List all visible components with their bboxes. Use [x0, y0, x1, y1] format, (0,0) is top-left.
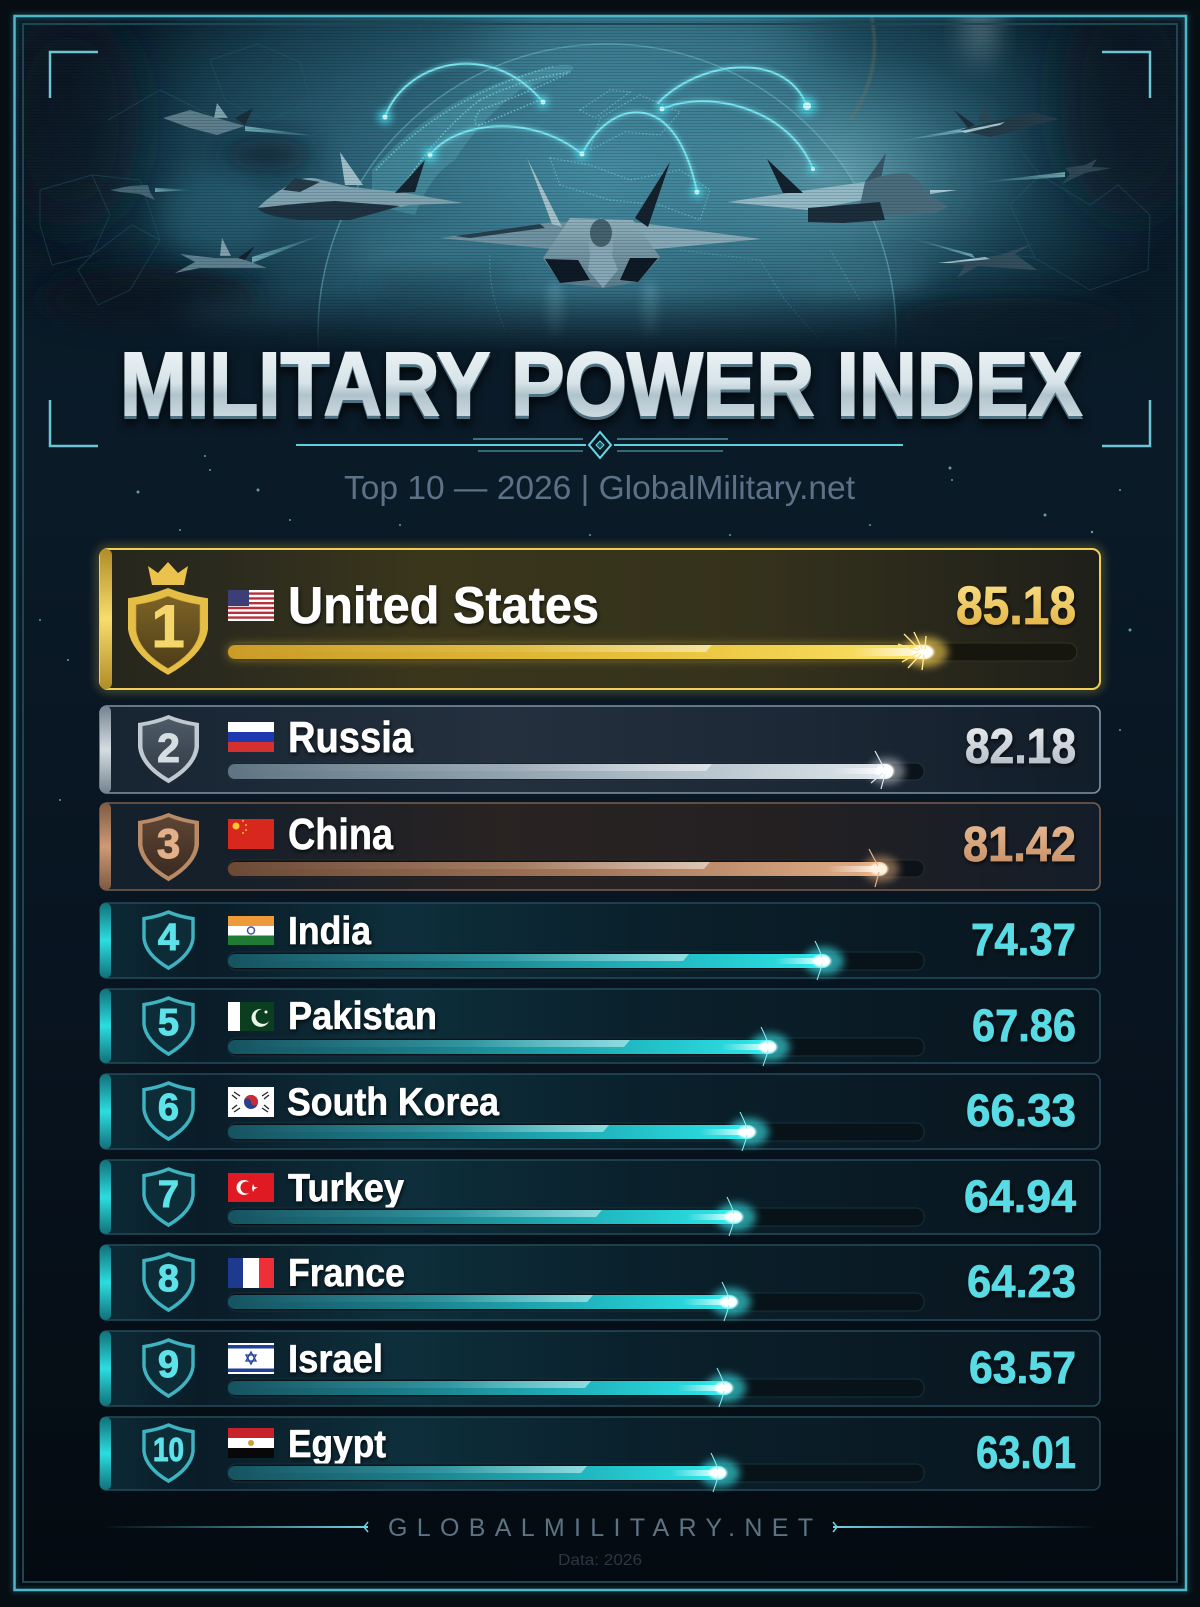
ranking row 2: Russia [100, 706, 1100, 793]
score: 64.23 [967, 1256, 1076, 1307]
country name: Israel [288, 1338, 383, 1381]
country name: Egypt [288, 1423, 386, 1466]
badge: rank 4 [144, 912, 193, 968]
country name: Russia [288, 713, 413, 762]
title: MILITARY POWER INDEX [120, 335, 1082, 435]
footer rule right [833, 1522, 1100, 1532]
ranking row 7: Turkey [100, 1160, 1100, 1236]
badge: rank 5 [144, 998, 193, 1054]
flag: India [228, 916, 274, 945]
bar [228, 751, 924, 789]
hex grid [40, 44, 1150, 305]
footer site name: GLOBALMILITARY.NET [388, 1514, 813, 1542]
flag: Israel [228, 1343, 274, 1374]
bar [228, 941, 924, 980]
badge: rank 9 [144, 1340, 193, 1396]
title divider [296, 432, 903, 458]
jet: centre [440, 158, 761, 288]
bar [228, 632, 1077, 670]
badge: rank 3 [138, 813, 199, 881]
badge: rank 2: 2 [157, 725, 180, 771]
ranking row 5: Pakistan [100, 989, 1100, 1066]
bar [228, 1368, 924, 1407]
ranking row 1: United States [100, 549, 1100, 689]
badge: rank 7 [144, 1169, 193, 1225]
title: MILITARY POWER INDEX [120, 338, 1082, 438]
score: 63.57 [969, 1342, 1076, 1393]
footer rule left [100, 1522, 368, 1532]
badge: rank 8: 8 [158, 1258, 179, 1300]
score: 85.18 [956, 576, 1076, 636]
subtitle: Top 10 — 2026 | GlobalMilitary.net [344, 469, 855, 506]
jet trails [155, 126, 1065, 340]
badge: rank 9: 9 [158, 1344, 179, 1386]
flag: France [228, 1258, 274, 1288]
footer data note: Data: 2026 [558, 1552, 642, 1569]
badge: rank 2 [138, 715, 199, 783]
bar [228, 1453, 924, 1492]
badge: rank 7: 7 [158, 1174, 179, 1216]
jet: mid right [1062, 159, 1112, 184]
score: 82.18 [965, 720, 1076, 774]
flag: Russia [228, 722, 274, 752]
flag: Turkey [228, 1173, 274, 1202]
corner brackets [50, 52, 1150, 446]
hero illustration [16, 17, 1184, 346]
country name: Turkey [288, 1167, 404, 1210]
badge: rank 4: 4 [158, 917, 179, 959]
flag: USA [228, 590, 274, 621]
jet: lower left [175, 238, 267, 273]
smoke clouds [32, 30, 1180, 326]
jet: top left [163, 103, 253, 135]
badge: rank 3: 3 [157, 820, 180, 867]
score: 63.01 [976, 1427, 1076, 1478]
flight arcs [385, 64, 813, 192]
ranking row 4: India [100, 903, 1100, 980]
country name: South Korea [287, 1081, 499, 1124]
score: 64.94 [964, 1171, 1076, 1222]
ranking row 9: Israel [100, 1331, 1100, 1407]
badge: rank 5: 5 [158, 1002, 179, 1044]
badge: rank 10 [144, 1425, 193, 1481]
score: 67.86 [972, 1000, 1076, 1051]
ranking row 3: China [100, 803, 1100, 890]
bar [228, 1282, 924, 1321]
score: 66.33 [966, 1085, 1076, 1136]
bar [228, 1027, 924, 1066]
flag: South Korea [228, 1087, 274, 1117]
score: 74.37 [971, 914, 1076, 965]
starfield [39, 455, 1132, 801]
flag: Pakistan [228, 1002, 274, 1031]
badge: rank 8 [144, 1254, 193, 1310]
bar [228, 1197, 924, 1236]
ranking row 6: South Korea [100, 1074, 1100, 1151]
badge: rank 10: 10 [153, 1431, 184, 1468]
score: 81.42 [963, 818, 1076, 872]
arc nodes [378, 96, 818, 198]
badge: rank 1 [128, 562, 208, 675]
badge: rank 6 [144, 1083, 193, 1139]
badge: rank 6: 6 [158, 1087, 179, 1129]
country name: France [288, 1252, 405, 1295]
bar [228, 849, 924, 887]
flag: Egypt [228, 1428, 274, 1458]
globe [317, 43, 897, 345]
badge: rank 1: 1 [151, 593, 185, 660]
jet: lower right [938, 244, 1037, 278]
jet: mid left [110, 185, 155, 200]
jet: top right [954, 104, 1059, 137]
ranking row 8: France [100, 1245, 1100, 1321]
country name: India [288, 910, 371, 953]
ranking row 10: Egypt [100, 1417, 1100, 1492]
flag: China [228, 819, 274, 849]
country name: United States [288, 577, 599, 635]
bar [228, 1112, 924, 1151]
country name: Pakistan [288, 995, 437, 1038]
jet: right [727, 153, 957, 223]
country name: China [288, 810, 393, 859]
jet: left [258, 152, 463, 220]
